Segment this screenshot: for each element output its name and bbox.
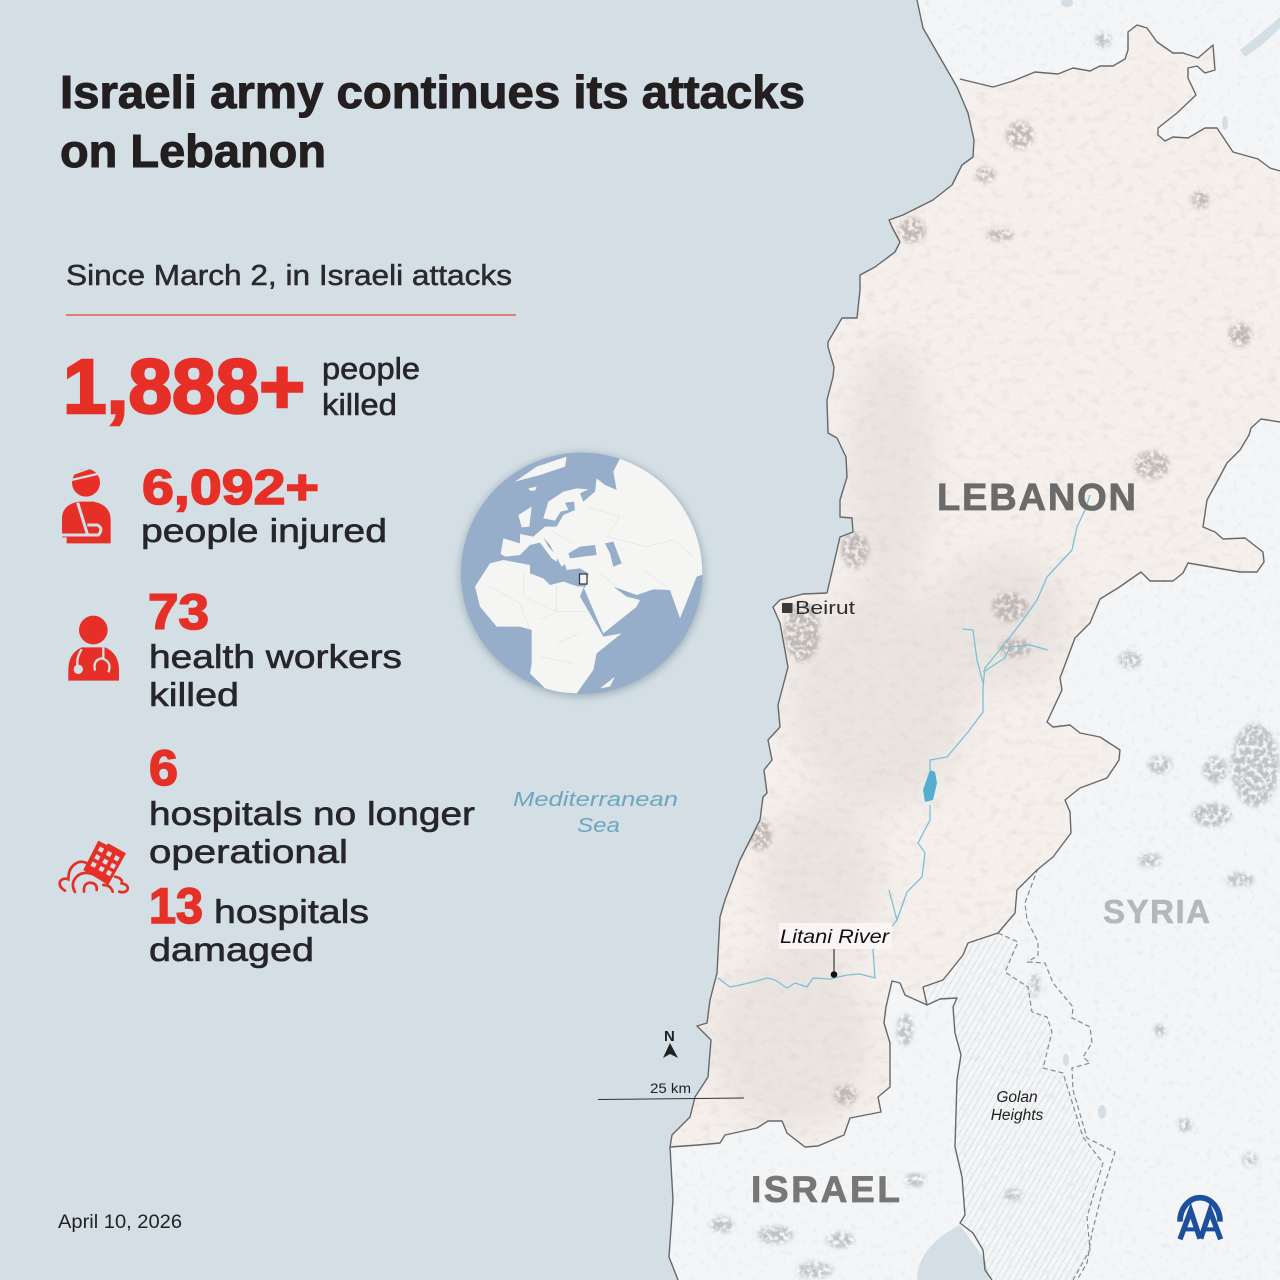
stat: people killed: killed	[322, 387, 397, 422]
label: Syria: SYRIA	[1103, 893, 1210, 930]
title: on Lebanon	[60, 125, 326, 177]
stat: hospitals no longer operational: operational	[149, 833, 348, 870]
stat: hospitals no longer operational: 6	[149, 740, 178, 796]
map: Golan Heights hatched area	[923, 868, 1115, 1280]
date: April 10, 2026	[58, 1212, 182, 1233]
stat: health workers killed: 73	[148, 584, 209, 640]
north arrow	[663, 1028, 678, 1058]
label: Golan Heights: Heights	[991, 1107, 1044, 1124]
map: surrounding land	[660, 0, 1280, 1280]
subtitle: Since March 2, in Israeli attacks	[66, 260, 512, 292]
callout: Litani River	[779, 923, 892, 978]
label: Mediterranean Sea: Mediterranean	[513, 789, 678, 811]
stat: people injured: 6,092+	[142, 461, 319, 515]
stat: people killed: 1,888+	[63, 344, 305, 430]
label: Golan Heights: Golan	[996, 1089, 1038, 1106]
stat: hospitals damaged: damaged	[149, 931, 314, 968]
icon: injured person	[61, 467, 111, 543]
stat: hospitals no longer operational: hospitals no longer	[149, 795, 475, 832]
water bodies on land	[917, 0, 1280, 1280]
lake: Qaraoun	[923, 770, 937, 802]
stat: hospitals damaged: 13	[149, 878, 203, 934]
icon: collapsed hospital	[60, 841, 128, 892]
north arrow: N	[664, 1028, 675, 1045]
stat: people killed: people	[322, 351, 420, 386]
stat: hospitals no longer operational	[149, 740, 475, 870]
callout: Litani River: Litani River	[780, 927, 890, 948]
map: coastline and borders	[669, 0, 992, 1280]
stat: people killed	[63, 344, 420, 430]
stat: hospitals damaged: hospitals	[214, 893, 369, 930]
locator box	[580, 574, 587, 584]
label: Golan Heights	[991, 1089, 1044, 1124]
icon: health worker	[68, 616, 119, 681]
stat: health workers killed: killed	[149, 676, 239, 713]
map: Lebanon territory	[660, 20, 1280, 1150]
label: Mediterranean Sea: Sea	[577, 815, 620, 837]
title	[60, 66, 805, 177]
stat: people injured	[141, 461, 387, 549]
logo: AA	[1180, 1198, 1221, 1239]
stat: people injured: people injured	[141, 512, 387, 549]
stat: health workers killed	[148, 584, 402, 713]
label: Mediterranean Sea	[513, 789, 678, 837]
label: Israel: ISRAEL	[751, 1169, 900, 1210]
title: Israeli army continues its attacks	[60, 66, 805, 118]
river: Litani	[718, 495, 1090, 988]
label: Beirut	[782, 598, 855, 618]
label: Lebanon: LEBANON	[937, 477, 1136, 519]
scale bar: 25 km	[650, 1080, 691, 1096]
stat: hospitals damaged	[149, 878, 369, 968]
stat: health workers killed: health workers	[149, 638, 402, 675]
label: Beirut: Beirut	[795, 598, 855, 618]
globe locator	[460, 450, 707, 697]
